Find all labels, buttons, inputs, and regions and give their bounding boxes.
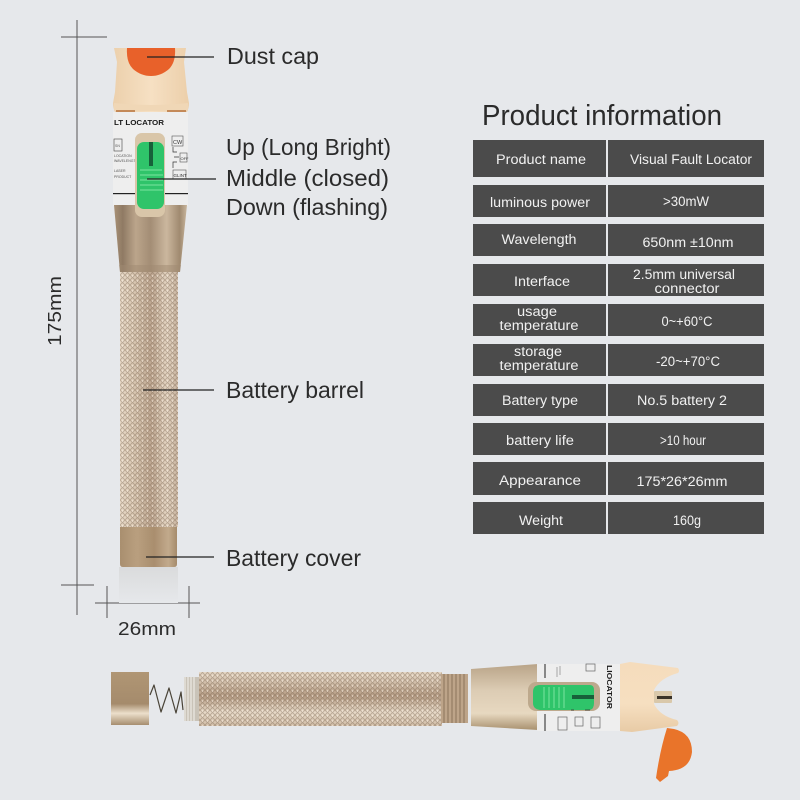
label text left: SN [115, 144, 120, 148]
row: appearance [473, 462, 764, 495]
label: switch positions: Down (flashing) [226, 194, 388, 220]
dust cap orange [127, 48, 175, 76]
row: usage temperature: usage [517, 304, 557, 319]
gold neck [471, 664, 538, 730]
row: product name: Visual Fault Locator [630, 152, 753, 167]
row: storage temperature: temperature [500, 358, 578, 373]
knurled barrel [120, 272, 178, 527]
switch ribs [544, 687, 564, 708]
knurled barrel [199, 672, 442, 726]
label rule [113, 193, 188, 194]
row: luminous power: luminous power [490, 195, 591, 210]
battery cover [111, 672, 149, 725]
white label [537, 664, 621, 731]
disassembled pen [111, 662, 692, 782]
label heading: LIOCATOR [605, 665, 614, 710]
gold neck [114, 205, 187, 272]
label text left [114, 139, 139, 179]
row: interface: 2.5mm universal [633, 267, 735, 282]
label marks right: OFF [180, 156, 189, 161]
label: Dust cap: Dust cap [227, 43, 319, 69]
row: weight: Weight [519, 513, 563, 528]
battery cover [120, 527, 177, 567]
switch slit [149, 142, 153, 166]
dimension: 175mm height: 175mm [45, 276, 65, 346]
cap body [113, 48, 189, 112]
upright pen [113, 48, 189, 603]
switch green [137, 142, 164, 209]
barrel thread [184, 677, 199, 721]
label: Battery barrel: Battery barrel [226, 377, 364, 403]
spring [150, 685, 183, 713]
row: usage temperature: temperature [500, 318, 578, 333]
label rule [544, 664, 546, 731]
reflection [119, 567, 178, 603]
row: battery type: Battery type [502, 393, 578, 408]
label: switch positions: Middle (closed) [226, 165, 389, 191]
label heading: LT LOCATOR [114, 118, 165, 127]
label: Battery cover: Battery cover [226, 545, 361, 571]
neck collar [119, 265, 181, 272]
label text left: PRODUCT [114, 175, 132, 179]
row: weight [473, 502, 764, 534]
row: battery type [473, 384, 764, 416]
row: weight: 160g [673, 513, 701, 528]
removed orange dust cap [656, 728, 692, 782]
dimension: 26mm width: 26mm [118, 619, 176, 639]
label text left: LOCATION [114, 154, 132, 158]
row: wavelength [473, 224, 764, 256]
label text left: WAVELENGTH [114, 159, 139, 163]
label text left: LASER [114, 169, 126, 173]
row: appearance: 175*26*26mm [636, 474, 728, 489]
leader lines [143, 57, 216, 557]
label: switch positions [226, 134, 391, 220]
row: storage temperature [473, 344, 764, 376]
row: luminous power [473, 185, 764, 217]
label marks [557, 664, 600, 730]
label marks right: GLINT [174, 173, 187, 178]
row: usage temperature [473, 304, 764, 336]
cap orange seam [116, 110, 186, 112]
cap body [620, 662, 679, 732]
row: battery life: battery life [506, 433, 574, 448]
row: interface: Interface [514, 274, 570, 289]
row: battery life: >10 hour [660, 433, 706, 448]
row: battery life [473, 423, 764, 455]
label marks right: CW [173, 140, 183, 146]
row: interface: connector [654, 281, 720, 296]
label marks right [172, 136, 189, 179]
label: switch positions: Up (Long Bright) [226, 134, 391, 160]
connector pin [654, 691, 672, 703]
switch slit [572, 695, 594, 699]
switch green [533, 685, 594, 710]
row: appearance: Appearance [499, 473, 581, 488]
switch ribs [140, 170, 163, 190]
heading: Product information: Product information [482, 100, 722, 132]
switch slot [135, 133, 165, 217]
row: storage temperature: -20~+70°C [656, 354, 720, 369]
neck thread [441, 674, 468, 723]
dimension: 26mm width [95, 586, 200, 639]
row: usage temperature: 0~+60°C [662, 314, 713, 329]
row: interface [473, 264, 764, 296]
row: luminous power: >30mW [663, 194, 709, 209]
row: product name: Product name [496, 152, 586, 167]
row: battery type: No.5 battery 2 [637, 393, 727, 408]
row: product name [473, 140, 764, 177]
cap ring [114, 103, 188, 111]
product information table [473, 140, 764, 534]
row: wavelength: 650nm ±10nm [642, 235, 734, 250]
row: wavelength: Wavelength [502, 232, 576, 247]
switch slot [528, 682, 600, 711]
white label [113, 112, 188, 206]
row: storage temperature: storage [514, 344, 562, 359]
